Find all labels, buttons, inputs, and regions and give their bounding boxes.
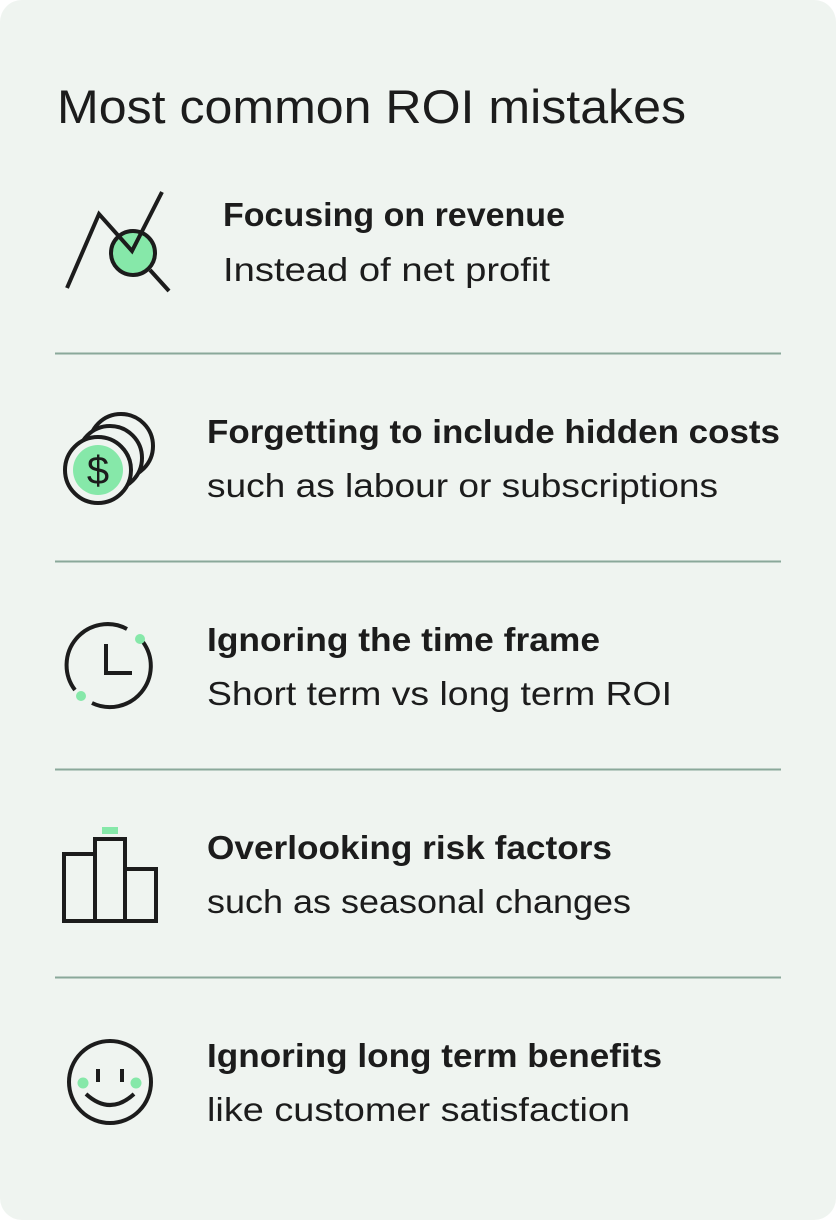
text: customer satisfaction: like customer satisfaction [207, 1091, 630, 1128]
text: seasonal changes: such as seasonal changes [207, 883, 631, 920]
icon: chart with magnifier [67, 192, 169, 291]
heading: time frame: Ignoring the time frame [207, 621, 600, 658]
row: hidden costs [65, 413, 780, 504]
title: Most common ROI mistakes [57, 80, 686, 133]
row: long term benefits [69, 1037, 662, 1128]
row: risk factors [64, 827, 631, 921]
heading: long term benefits: Ignoring long term benefits [207, 1037, 662, 1074]
text: short vs long term: Short term vs long term ROI [207, 675, 672, 712]
text: labour or subscriptions: such as labour or subscriptions [207, 467, 718, 504]
row: time frame [67, 621, 672, 712]
row: focusing on revenue [67, 192, 565, 291]
heading: hidden costs: Forgetting to include hidden costs [207, 413, 780, 450]
heading: focusing on revenue: Focusing on revenue [223, 196, 565, 233]
icon: clock [67, 624, 151, 707]
icon: smiley [69, 1041, 151, 1123]
icon: bar chart [64, 827, 156, 921]
text: instead of net profit: Instead of net profit [223, 251, 550, 288]
icon: coins [65, 414, 153, 503]
icon: coins: $ [87, 449, 109, 493]
heading: risk factors: Overlooking risk factors [207, 829, 612, 866]
